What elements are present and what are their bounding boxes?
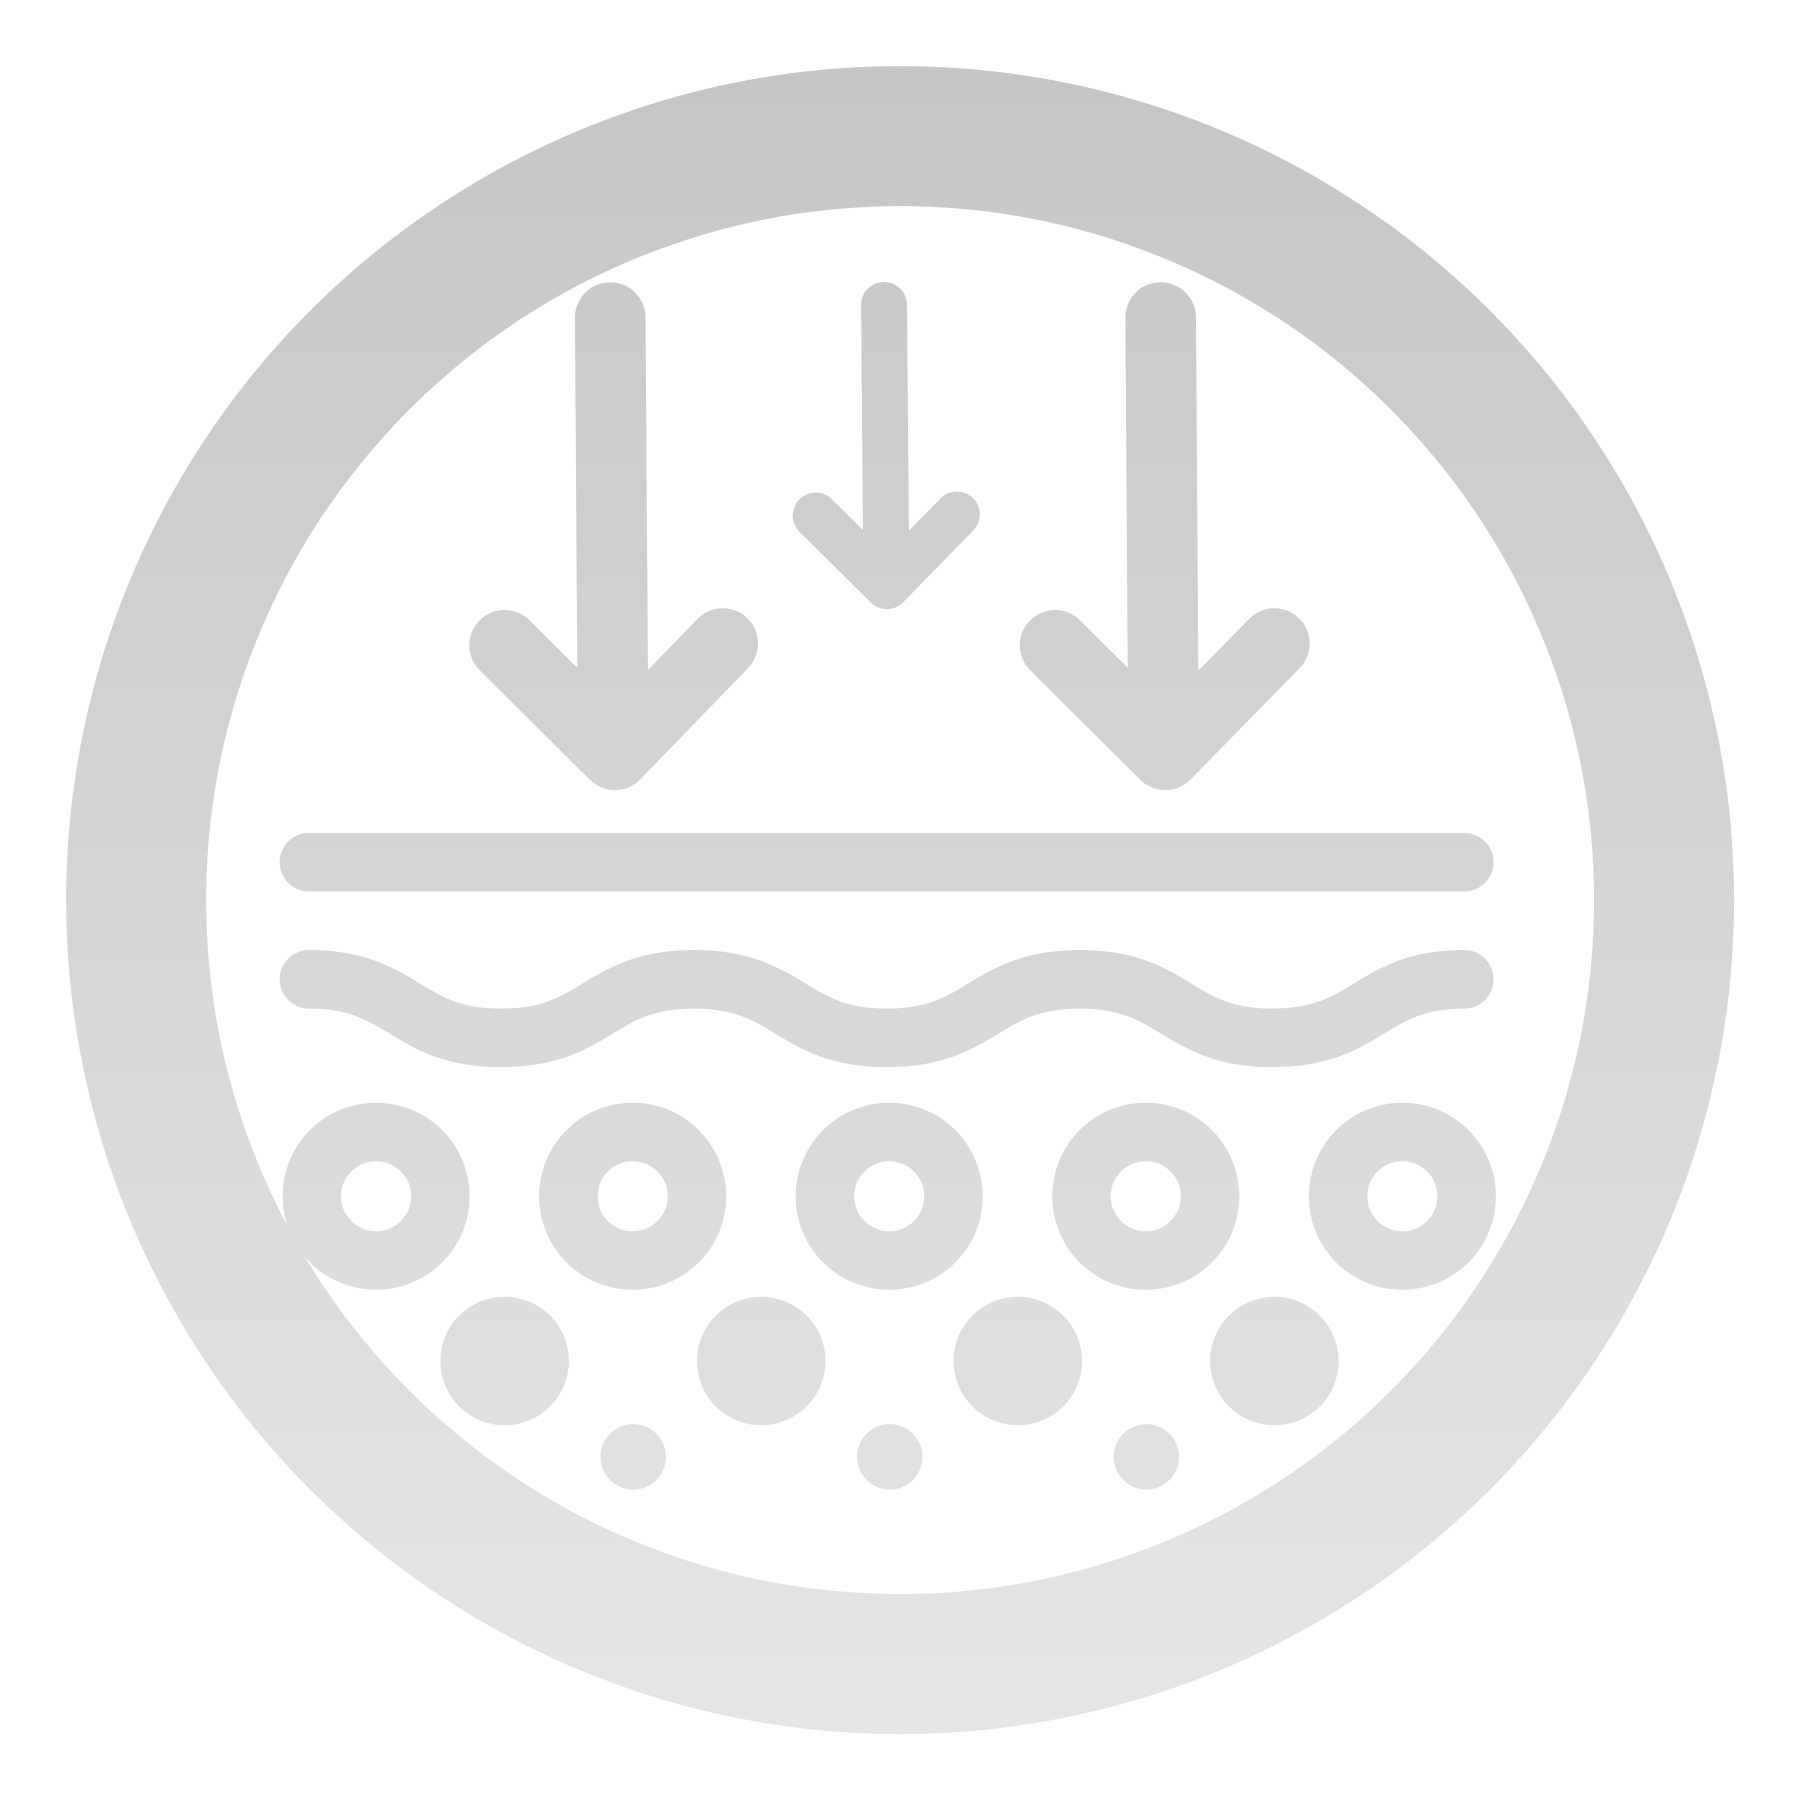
- row of small solid dots: [600, 1424, 1179, 1490]
- row of medium solid dots: [440, 1297, 1339, 1425]
- row of ring-shaped cells: [312, 1132, 1467, 1261]
- wavy skin layer: [309, 979, 1464, 1038]
- outer circular ring: [136, 136, 1664, 1664]
- icon: centre small down arrow: [816, 305, 957, 586]
- skin surface bar: [309, 837, 1464, 888]
- icon: left large down arrow: [505, 318, 723, 755]
- icon: right large down arrow: [1055, 318, 1274, 755]
